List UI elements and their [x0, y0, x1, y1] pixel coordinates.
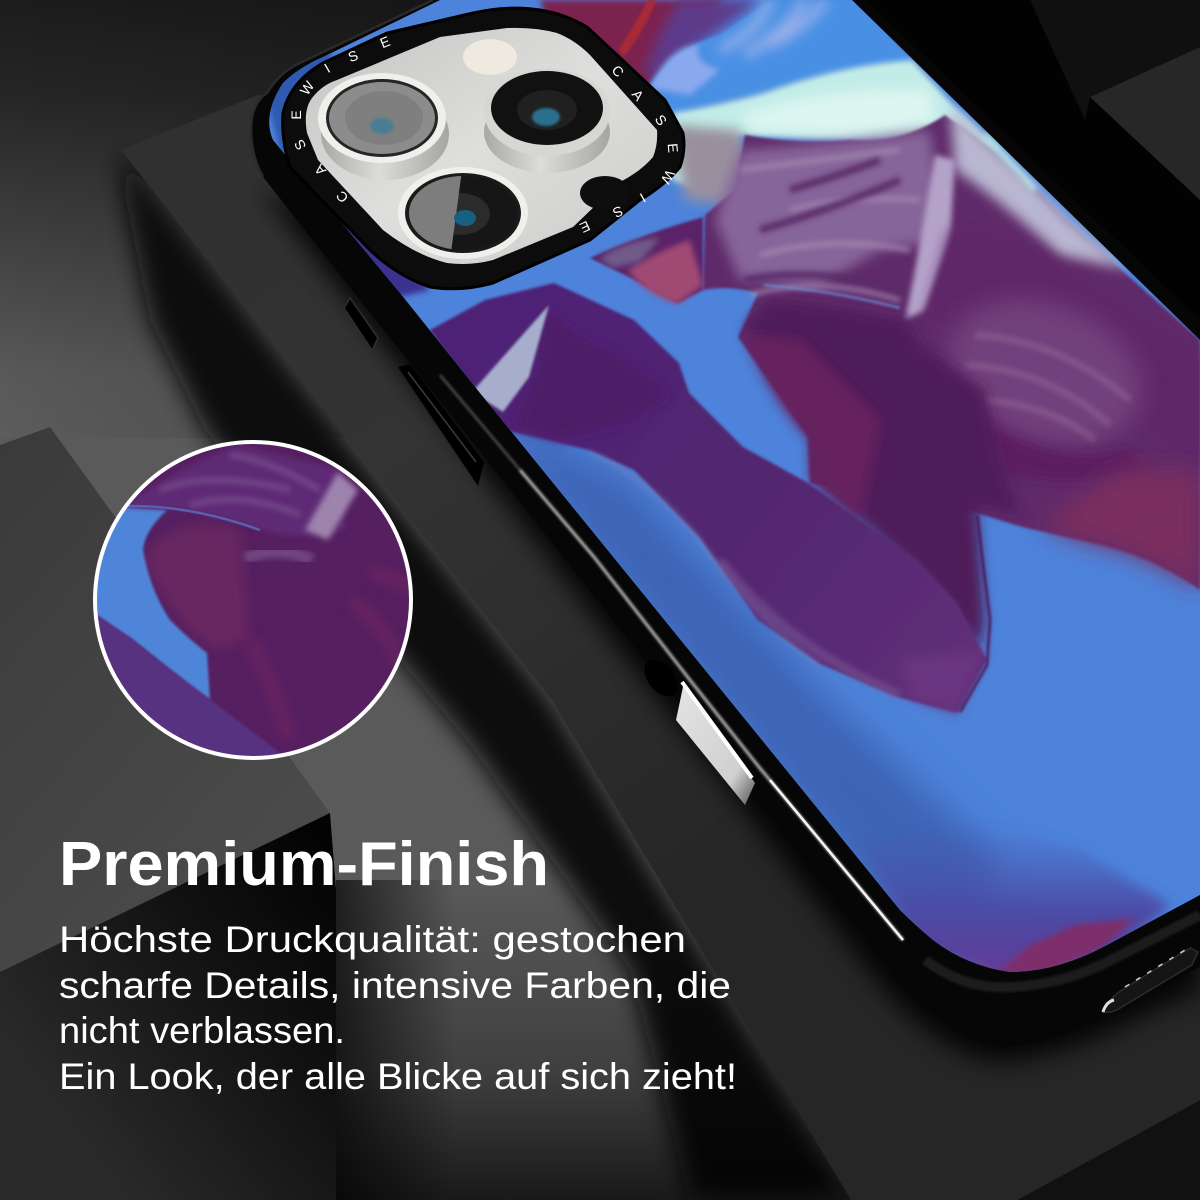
red accent	[618, 0, 656, 56]
sliver purple	[342, 223, 432, 299]
lavender mid fur	[715, 130, 945, 285]
inset magenta shoulder	[145, 524, 250, 650]
Casewise lettering right: A	[629, 86, 648, 104]
body text: Höchste Druckqualität: gestochen	[59, 919, 686, 960]
purple right of stripe	[925, 230, 1200, 470]
Casewise lettering right	[577, 62, 681, 236]
foreleg	[430, 283, 987, 713]
back leg magenta	[745, 335, 880, 520]
body text: Ein Look, der alle Blicke auf sich zieht!	[59, 1056, 737, 1097]
inset purple ground	[90, 440, 420, 760]
Casewise lettering right: S	[652, 112, 670, 128]
lidar sensor	[580, 176, 630, 210]
lens: bottom	[398, 167, 530, 260]
blue ground	[250, 0, 1200, 1000]
knee tip	[900, 650, 985, 713]
inset pale tuft	[305, 472, 358, 540]
case body	[251, 0, 1200, 1047]
lavender blob	[650, 45, 720, 95]
side button: silver	[638, 653, 755, 805]
phone screen artwork	[250, 0, 1200, 1000]
body text	[59, 919, 737, 1097]
nostril speckle	[600, 238, 660, 268]
lower purple wash	[874, 839, 1172, 972]
lens: right	[484, 68, 610, 156]
Casewise lettering left: E	[378, 33, 392, 51]
hoof dark	[515, 310, 670, 440]
red-purple top	[537, 0, 724, 85]
Casewise lettering left: W	[297, 77, 318, 98]
cyan fringe streaks	[983, 131, 1039, 194]
camera island	[283, 8, 684, 289]
inset white ring	[95, 442, 411, 758]
outer rim	[251, 0, 433, 177]
glass window	[306, 28, 657, 264]
Casewise lettering left: E	[288, 110, 304, 120]
pale edge of foreleg	[590, 452, 820, 665]
side button: long	[398, 364, 484, 486]
phone: drop shadow	[262, 190, 1200, 1062]
pale vertical stripe	[905, 155, 955, 320]
inset upper fur	[125, 445, 345, 536]
black bezel with Casewise text	[283, 8, 684, 289]
lower rim band	[925, 915, 1200, 987]
Casewise lettering left: C	[333, 188, 351, 206]
phone case	[251, 0, 1200, 1047]
dark under swirl	[996, 425, 1138, 480]
inset brush highlight	[245, 552, 312, 560]
rim highlight	[520, 470, 903, 940]
light fur strokes	[740, 150, 920, 300]
swirl strokes	[965, 335, 1130, 440]
lens: right barrel	[484, 91, 610, 173]
body text: scharfe Details, intensive Farben, die	[59, 965, 731, 1006]
body text: nicht verblassen.	[59, 1010, 345, 1051]
inset lower violet	[90, 612, 283, 765]
inset blue line	[128, 506, 260, 530]
Casewise lettering right: W	[657, 167, 678, 187]
Casewise lettering left: S	[291, 137, 309, 153]
purple upper streak	[645, 0, 760, 85]
rosy flank	[1040, 470, 1200, 590]
sliver dark colours	[270, 52, 334, 154]
magenta streak near bottom	[1000, 918, 1135, 972]
side gloss	[770, 780, 903, 940]
head lower edge line	[764, 285, 900, 308]
upper body fur	[703, 115, 1200, 590]
heading: Premium-Finish	[59, 830, 549, 899]
inset blue band	[90, 507, 210, 700]
flash	[463, 39, 517, 75]
bright core	[740, 89, 935, 135]
Casewise lettering left: A	[310, 161, 329, 179]
inset magenta strokes	[250, 570, 412, 740]
blue sky	[650, 0, 912, 112]
Casewise lettering left: S	[346, 47, 360, 65]
Casewise lettering right: I	[637, 190, 649, 206]
Casewise lettering right: E	[665, 143, 681, 153]
charging port	[1103, 947, 1198, 1012]
pale fringe at right	[950, 107, 1130, 270]
darker blue along left edge	[505, 424, 998, 960]
cyan-white body	[672, 60, 1000, 190]
Casewise lettering left	[288, 33, 392, 206]
back leg dark	[745, 300, 1020, 650]
back leg dark edge	[960, 515, 990, 712]
Casewise lettering right: S	[610, 203, 626, 221]
detail magnifier circle	[90, 440, 420, 765]
rim highlight upper	[440, 375, 520, 470]
Casewise lettering right: E	[577, 218, 593, 236]
side button: mute	[344, 298, 378, 350]
lavender top strokes	[720, 0, 825, 55]
dark fur lines	[745, 160, 905, 292]
shoulder swirl	[945, 295, 1146, 448]
lens: main left	[318, 73, 446, 163]
horn	[472, 305, 549, 412]
Casewise lettering right: C	[609, 62, 627, 80]
grey-green muzzle top	[672, 125, 755, 205]
lens: main left barrel	[321, 88, 449, 180]
inset fur strokes	[160, 455, 320, 515]
muzzle purple	[590, 217, 703, 303]
foreleg lower sheen	[720, 560, 900, 695]
Casewise lettering left: I	[321, 60, 333, 76]
snout rose	[628, 240, 703, 304]
